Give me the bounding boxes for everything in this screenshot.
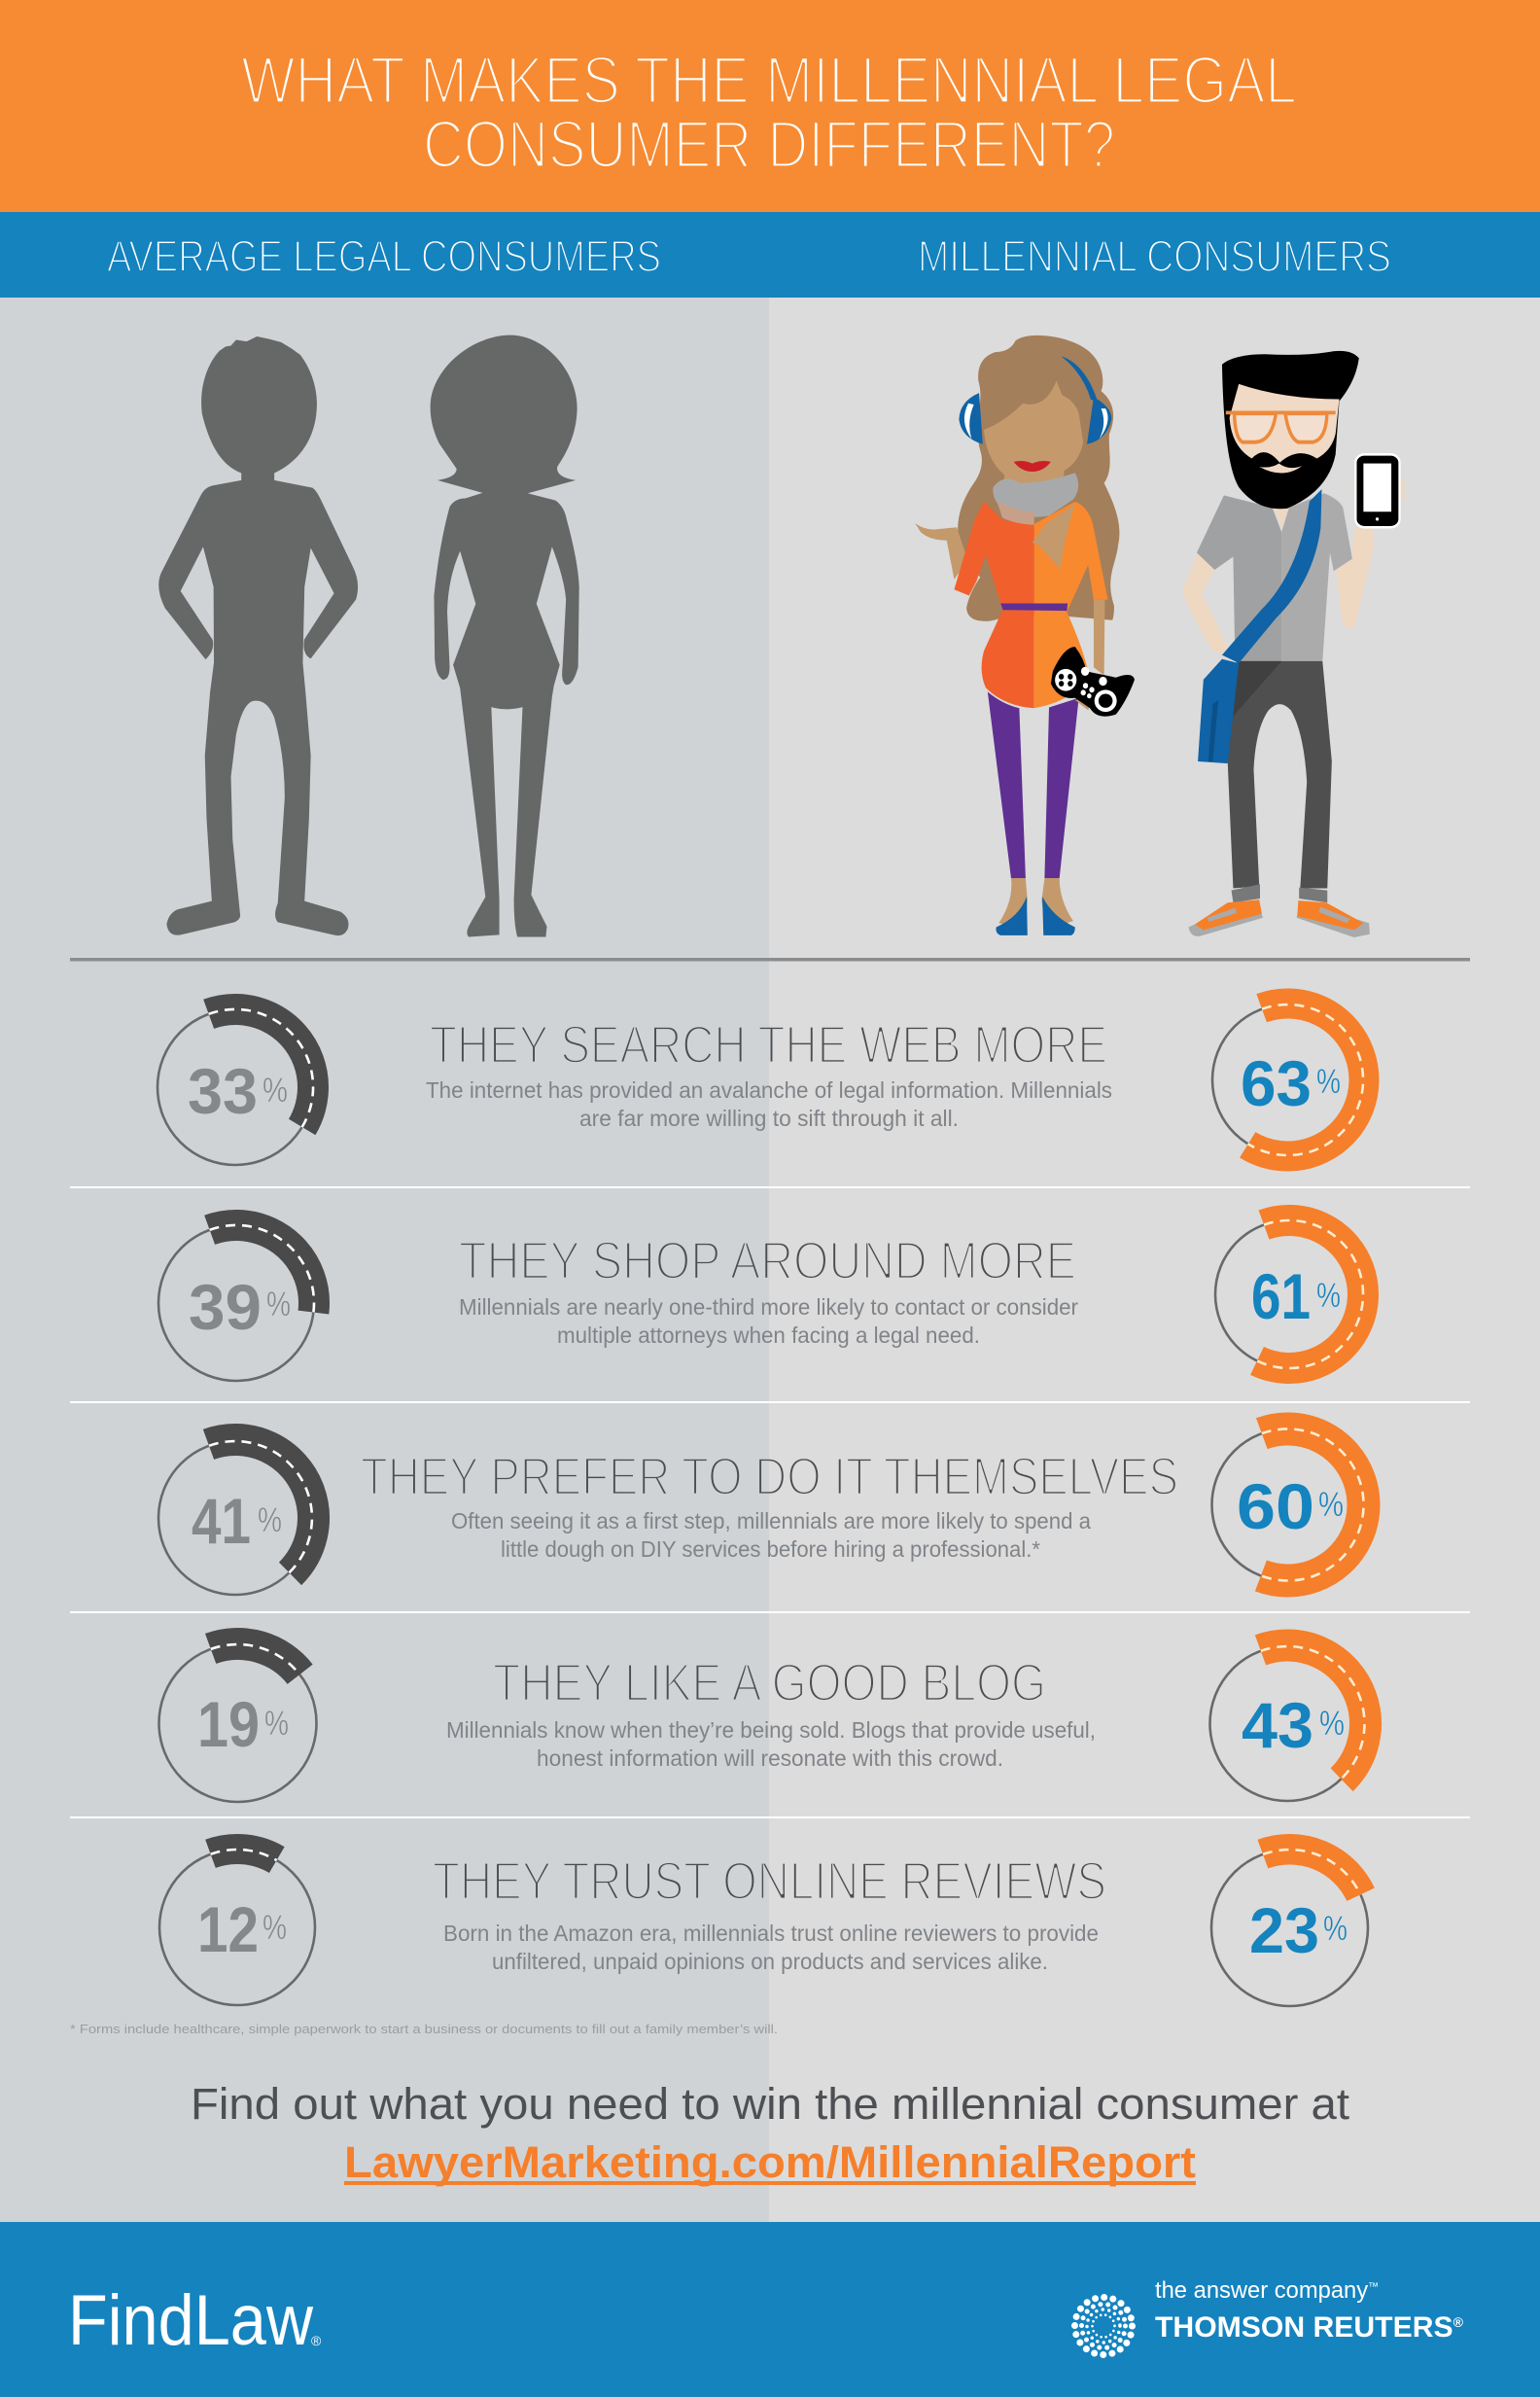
chart: millennial 63 percent ring: % <box>1316 1063 1341 1101</box>
chart: millennial 61 percent ring: % <box>1316 1277 1341 1315</box>
chart: average 12 percent ring: 12 <box>197 1893 259 1965</box>
description: are far more willing to sift through it all. <box>579 1106 959 1131</box>
chart: millennial 63 percent ring: 63 <box>1241 1047 1312 1119</box>
chart: millennial 60 percent ring: % <box>1318 1486 1344 1524</box>
logo: FindLaw: FindLaw <box>68 2281 313 2360</box>
description: The internet has provided an avalanche of legal information. Millennials <box>426 1077 1112 1103</box>
panel: row 4 good blog <box>136 1622 1387 1824</box>
chart: average 33 percent ring: % <box>262 1072 288 1110</box>
logo: Thomson Reuters wordmark: ® <box>1453 2314 1464 2330</box>
chart: millennial 23 percent ring: 23 <box>1249 1894 1319 1966</box>
call to action: Find out what you need to win the millennial consumer at <box>191 2079 1350 2129</box>
icon: orange glasses <box>1226 412 1336 442</box>
description <box>446 1717 1096 1771</box>
chart: millennial 63 percent ring <box>1190 982 1385 1178</box>
description: honest information will resonate with this crowd. <box>537 1745 1003 1771</box>
heading: THEY TRUST ONLINE REVIEWS <box>433 1851 1106 1911</box>
chart: average 41 percent ring <box>135 1418 335 1618</box>
description: Millennials know when they’re being sold. Blogs that provide useful, <box>446 1717 1096 1743</box>
column heading: average legal consumers: AVERAGE LEGAL CONSUMERS <box>107 231 661 281</box>
description: multiple attorneys when facing a legal need. <box>557 1322 980 1348</box>
chart: millennial 60 percent ring: 60 <box>1237 1470 1314 1542</box>
heading: THEY SHOP AROUND MORE <box>459 1230 1076 1290</box>
description: Millennials are nearly one-third more likely to contact or consider <box>459 1294 1078 1320</box>
heading: THEY LIKE A GOOD BLOG <box>493 1652 1046 1712</box>
chart: average 33 percent ring <box>135 987 335 1187</box>
tagline: the answer company: the answer company <box>1155 2277 1370 2304</box>
column heading: millennial consumers: MILLENNIAL CONSUMERS <box>918 231 1391 281</box>
link: LawyerMarketing.com/MillennialReport <box>344 2137 1196 2187</box>
description <box>451 1508 1091 1562</box>
chart: average 39 percent ring: % <box>266 1286 291 1323</box>
chart: average 41 percent ring: 41 <box>192 1485 251 1557</box>
chart: average 19 percent ring <box>136 1622 339 1824</box>
logo: FindLaw: ® <box>311 2333 322 2348</box>
chart: millennial 43 percent ring: % <box>1319 1705 1345 1743</box>
call to action <box>191 2079 1350 2187</box>
chart: millennial 61 percent ring: 61 <box>1251 1260 1311 1332</box>
title <box>241 43 1297 182</box>
panel: row 3 do it themselves <box>135 1408 1384 1618</box>
footnote: * Forms include healthcare, simple paperwork to start a business or documents to fill out a family member’s will. <box>70 2022 778 2036</box>
panel: row 2 shop around <box>136 1200 1383 1403</box>
chart: millennial 61 percent ring <box>1195 1200 1383 1389</box>
icon: smartphone <box>1355 454 1400 527</box>
chart: average 12 percent ring <box>137 1827 337 2027</box>
chart: average 39 percent ring <box>136 1203 336 1403</box>
icon: female silhouette <box>431 335 579 937</box>
icon: millennial man <box>1183 351 1404 937</box>
chart: millennial 23 percent ring <box>1189 1827 1390 2028</box>
icon: millennial woman <box>915 335 1135 935</box>
chart: millennial 23 percent ring: % <box>1323 1910 1348 1948</box>
description: Often seeing it as a first step, millennials are more likely to spend a <box>451 1508 1091 1533</box>
tagline: the answer company: ™ <box>1368 2281 1379 2293</box>
chart: millennial 43 percent ring: 43 <box>1242 1689 1313 1761</box>
description <box>426 1077 1112 1131</box>
divider: top rule <box>70 958 1470 961</box>
heading: THEY SEARCH THE WEB MORE <box>430 1014 1107 1075</box>
title: WHAT MAKES THE MILLENNIAL LEGAL <box>241 43 1297 118</box>
title: CONSUMER DIFFERENT? <box>423 107 1115 182</box>
logo: Thomson Reuters wordmark: THOMSON REUTERS <box>1155 2311 1452 2344</box>
description <box>443 1921 1099 1974</box>
icon: game controller <box>1051 647 1135 717</box>
icon: millennial consumers illustration <box>915 335 1404 937</box>
chart: millennial 43 percent ring <box>1187 1623 1387 1824</box>
description: Born in the Amazon era, millennials trust online reviewers to provide <box>443 1921 1099 1946</box>
panel: row 5 online reviews <box>137 1827 1390 2028</box>
chart: average 19 percent ring: 19 <box>197 1688 260 1760</box>
panel: row 1 search the web <box>135 982 1385 1187</box>
description: unfiltered, unpaid opinions on products and services alike. <box>492 1949 1048 1974</box>
heading: THEY PREFER TO DO IT THEMSELVES <box>361 1446 1178 1506</box>
logo: Thomson Reuters dot globe <box>1075 2297 1132 2355</box>
icon: male silhouette <box>158 336 358 935</box>
chart: average 33 percent ring: 33 <box>188 1055 258 1127</box>
panel: orange title band <box>0 0 1540 212</box>
description <box>459 1294 1078 1348</box>
chart: average 39 percent ring: 39 <box>189 1271 262 1343</box>
panel: blue footer <box>0 2222 1540 2397</box>
icon: average consumers silhouettes <box>158 335 579 937</box>
chart: average 41 percent ring: % <box>258 1501 282 1539</box>
panel: blue column header band <box>0 212 1540 298</box>
description: little dough on DIY services before hiring a professional.* <box>501 1536 1040 1562</box>
chart: average 12 percent ring: % <box>262 1909 287 1947</box>
chart: millennial 60 percent ring <box>1191 1408 1384 1602</box>
chart: average 19 percent ring: % <box>264 1705 289 1743</box>
